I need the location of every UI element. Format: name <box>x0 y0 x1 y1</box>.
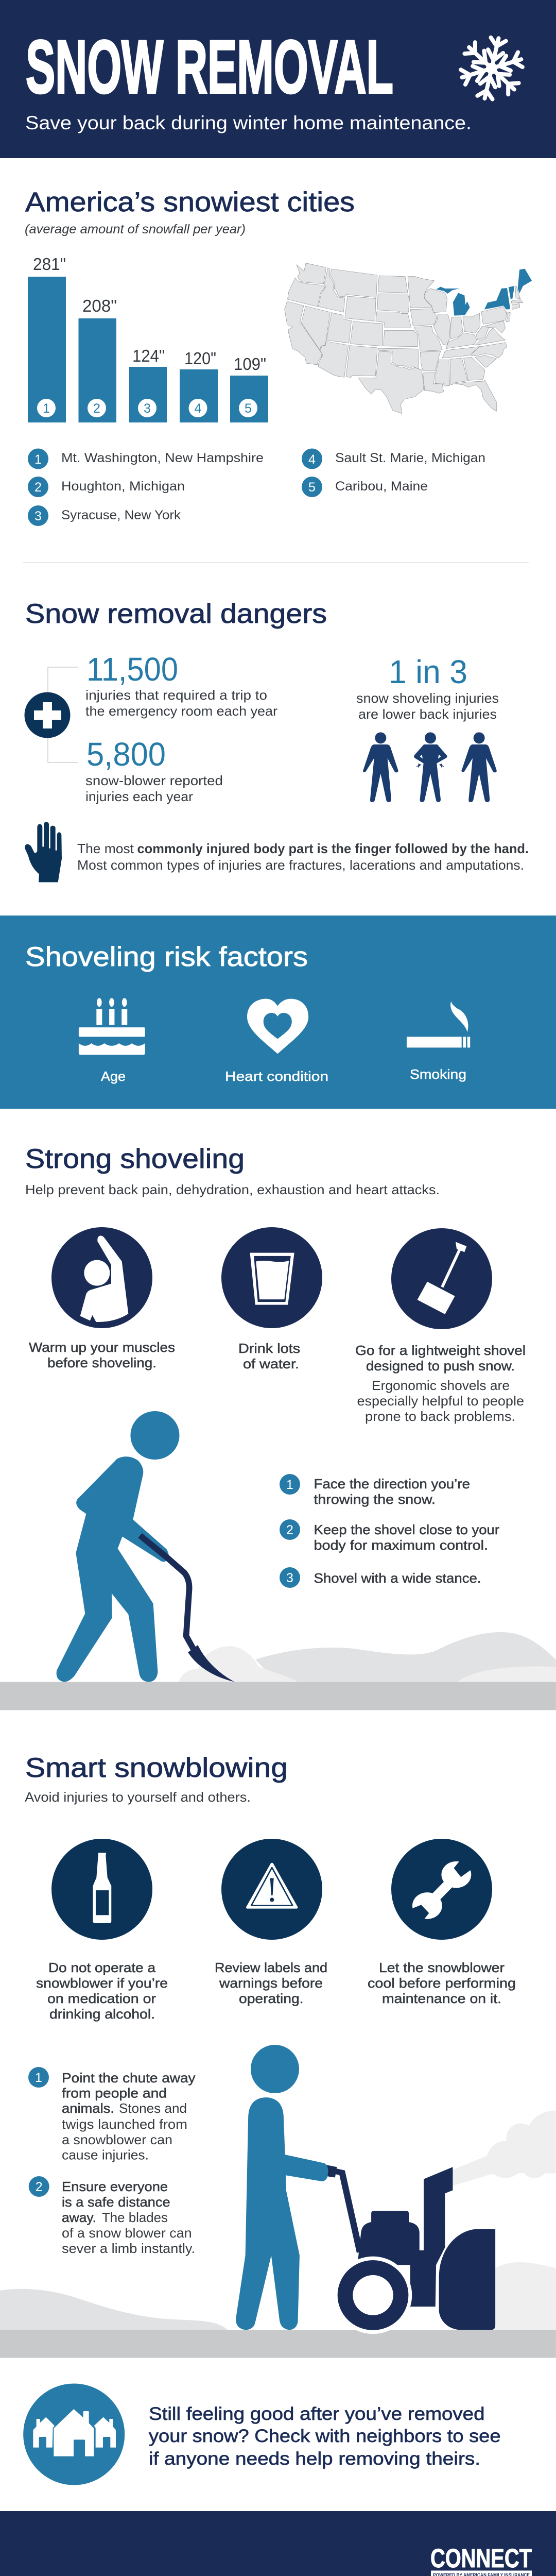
stat: 11,500: injuries that required a trip to <box>85 687 267 703</box>
tip 2: The blades <box>102 2210 168 2225</box>
caption: medication: Do not operate a <box>48 1960 156 1975</box>
caption: warm up: Warm up your muscles <box>29 1340 175 1355</box>
caption: medication: snowblower if you’re <box>36 1975 168 1991</box>
stat: 11,500: 11,500 <box>86 651 178 688</box>
callout text: your snow? Check with neighbors to see <box>149 2426 500 2446</box>
injury note <box>77 841 529 873</box>
caption: medication <box>36 1960 168 2022</box>
tips list: throwing the snow. <box>314 1492 436 1507</box>
callout text: if anyone needs help removing theirs. <box>149 2449 480 2469</box>
panel: risk factors <box>0 916 556 1109</box>
caption: warm up <box>29 1340 175 1370</box>
tips list: 1 <box>286 1478 293 1492</box>
caption: labels: operating. <box>239 1991 304 2006</box>
stat: 1 in 3: are lower back injuries <box>358 706 497 722</box>
tip 2: is a safe distance <box>62 2194 170 2210</box>
heading: Snow removal dangers <box>25 599 327 629</box>
callout text <box>149 2404 500 2469</box>
tip 1: 1 <box>35 2071 42 2085</box>
injury note: The most <box>77 841 134 856</box>
stat: 5,800: snow-blower reported <box>85 773 223 788</box>
scene: person shoveling <box>0 1411 556 1710</box>
caption: drink: of water. <box>243 1356 299 1371</box>
caption: medication: on medication or <box>47 1991 156 2006</box>
tip 1 <box>28 2067 196 2163</box>
bar chart: 120" <box>184 349 216 368</box>
injury note: Most common types of injuries are fractures, lacerations and amputations. <box>77 857 524 873</box>
legend: Syracuse, New York <box>61 508 181 522</box>
bar chart: 4 <box>195 401 202 416</box>
note: (average amount of snowfall per year) <box>25 222 246 236</box>
injury note: commonly injured body part is the finger followed by the hand. <box>137 841 529 856</box>
legend: Houghton, Michigan <box>61 479 185 494</box>
legend: 4 <box>308 452 316 467</box>
header <box>0 0 556 158</box>
legend: Mt. Washington, New Hampshire <box>61 451 264 465</box>
bar chart <box>28 255 268 422</box>
icon: three people <box>363 732 497 802</box>
subtitle: Save your back during winter home maintenance. <box>25 112 472 133</box>
tip 1: cause injuries. <box>62 2147 149 2163</box>
map <box>285 263 532 414</box>
intro: Help prevent back pain, dehydration, exhaustion and heart attacks. <box>25 1182 440 1197</box>
tip 2 <box>29 2176 195 2256</box>
tips list: body for maximum control. <box>314 1537 488 1553</box>
caption: cool down: maintenance on it. <box>382 1991 501 2006</box>
stat: 11,500 <box>85 651 277 719</box>
tip 1: animals. <box>62 2100 114 2116</box>
legend: Caribou, Maine <box>335 479 428 494</box>
bar chart: 208" <box>82 296 117 315</box>
caption: lightweight shovel: Go for a lightweight shovel <box>355 1343 526 1358</box>
caption: labels: warnings before <box>219 1975 323 1991</box>
icon: hand <box>25 822 62 882</box>
label: heart condition: Heart condition <box>225 1069 328 1084</box>
tip 1: from people and <box>62 2086 167 2101</box>
stat: 1 in 3: snow shoveling injuries <box>356 690 499 706</box>
legend <box>28 448 485 526</box>
icon: bottle <box>51 1839 152 1940</box>
caption: cool down: cool before performing <box>368 1975 516 1991</box>
tips list: Shovel with a wide stance. <box>314 1570 481 1586</box>
icon: stretching <box>51 1227 152 1328</box>
caption: lightweight shovel: prone to back problems. <box>365 1409 515 1424</box>
caption: labels: Review labels and <box>215 1960 327 1975</box>
tip 1: twigs launched from <box>62 2116 187 2132</box>
caption: cool down: Let the snowblower <box>379 1960 505 1975</box>
caption: lightweight shovel: especially helpful to people <box>357 1393 524 1409</box>
stat: 1 in 3: 1 in 3 <box>389 653 467 690</box>
tips list <box>280 1474 499 1588</box>
caption: lightweight shovel: Ergonomic shovels are <box>372 1378 510 1393</box>
legend: 3 <box>34 509 42 523</box>
bar chart: 5 <box>245 401 252 416</box>
icon: houses <box>23 2383 125 2485</box>
stat: 11,500: the emergency room each year <box>85 703 277 719</box>
stat: 5,800: 5,800 <box>86 736 166 773</box>
stat: 5,800: injuries each year <box>85 789 193 804</box>
panel: strong shoveling <box>0 1144 556 1710</box>
bar chart: 109" <box>234 354 266 374</box>
legend: 2 <box>34 480 42 495</box>
label: age: Age <box>101 1069 126 1084</box>
tip 2: Ensure everyone <box>62 2179 168 2194</box>
bar chart: 2 <box>93 401 100 416</box>
caption: drink: Drink lots <box>238 1341 300 1356</box>
tips list: Face the direction you’re <box>314 1476 470 1492</box>
icon: heart <box>247 999 308 1054</box>
caption: drink <box>238 1341 300 1371</box>
icon: medical cross <box>25 667 78 762</box>
panel: dangers <box>25 599 529 882</box>
icon: cake <box>79 998 145 1055</box>
tip 1: Stones and <box>119 2100 187 2116</box>
heading: America’s snowiest cities <box>25 187 355 217</box>
callout text: Still feeling good after you’ve removed <box>149 2404 485 2424</box>
caption: cool down <box>368 1960 516 2006</box>
legend: 1 <box>34 452 42 467</box>
icon: warning <box>221 1839 322 1940</box>
tips list: 3 <box>286 1571 293 1585</box>
caption: lightweight shovel <box>355 1343 526 1424</box>
bar chart: 1 <box>43 401 50 416</box>
tip 2: of a snow blower can <box>62 2225 192 2241</box>
heading: Shoveling risk factors <box>25 942 308 972</box>
panel: snowiest cities <box>25 187 532 526</box>
stat: 5,800 <box>85 736 223 804</box>
scene: person with snowblower <box>0 2045 556 2358</box>
tips list: 2 <box>286 1523 293 1537</box>
tips list: Keep the shovel close to your <box>314 1522 499 1537</box>
panel: neighbors callout <box>23 2383 500 2485</box>
tip 2: sever a limb instantly. <box>62 2241 195 2256</box>
bar chart: 3 <box>144 401 151 416</box>
footer <box>0 2511 556 2576</box>
bar chart: 124" <box>132 346 165 365</box>
heading: Strong shoveling <box>25 1144 245 1174</box>
tip 2: 2 <box>36 2180 43 2194</box>
heading: Smart snowblowing <box>25 1753 288 1783</box>
tip 1: Point the chute away <box>62 2070 196 2086</box>
caption: warm up: before shoveling. <box>47 1355 157 1370</box>
legend: 5 <box>308 480 316 495</box>
bar chart: 281" <box>33 255 66 274</box>
label: smoking: Smoking <box>410 1066 466 1082</box>
intro: Avoid injuries to yourself and others. <box>25 1789 251 1805</box>
icon: snowflake <box>460 37 524 100</box>
icon: shovel <box>391 1228 492 1329</box>
caption: labels <box>215 1960 327 2006</box>
tip 1: a snowblower can <box>62 2132 172 2147</box>
legend: Sault St. Marie, Michigan <box>335 451 485 465</box>
caption: lightweight shovel: designed to push snow. <box>366 1358 515 1374</box>
icon: water glass <box>221 1227 322 1328</box>
tip 2: away. <box>62 2210 96 2225</box>
icon: wrench <box>391 1839 492 1940</box>
caption: medication: drinking alcohol. <box>49 2006 155 2022</box>
stat: 1 in 3 <box>356 653 499 722</box>
panel: smart snowblowing <box>0 1753 556 2358</box>
icon: cigarette <box>407 1002 470 1047</box>
